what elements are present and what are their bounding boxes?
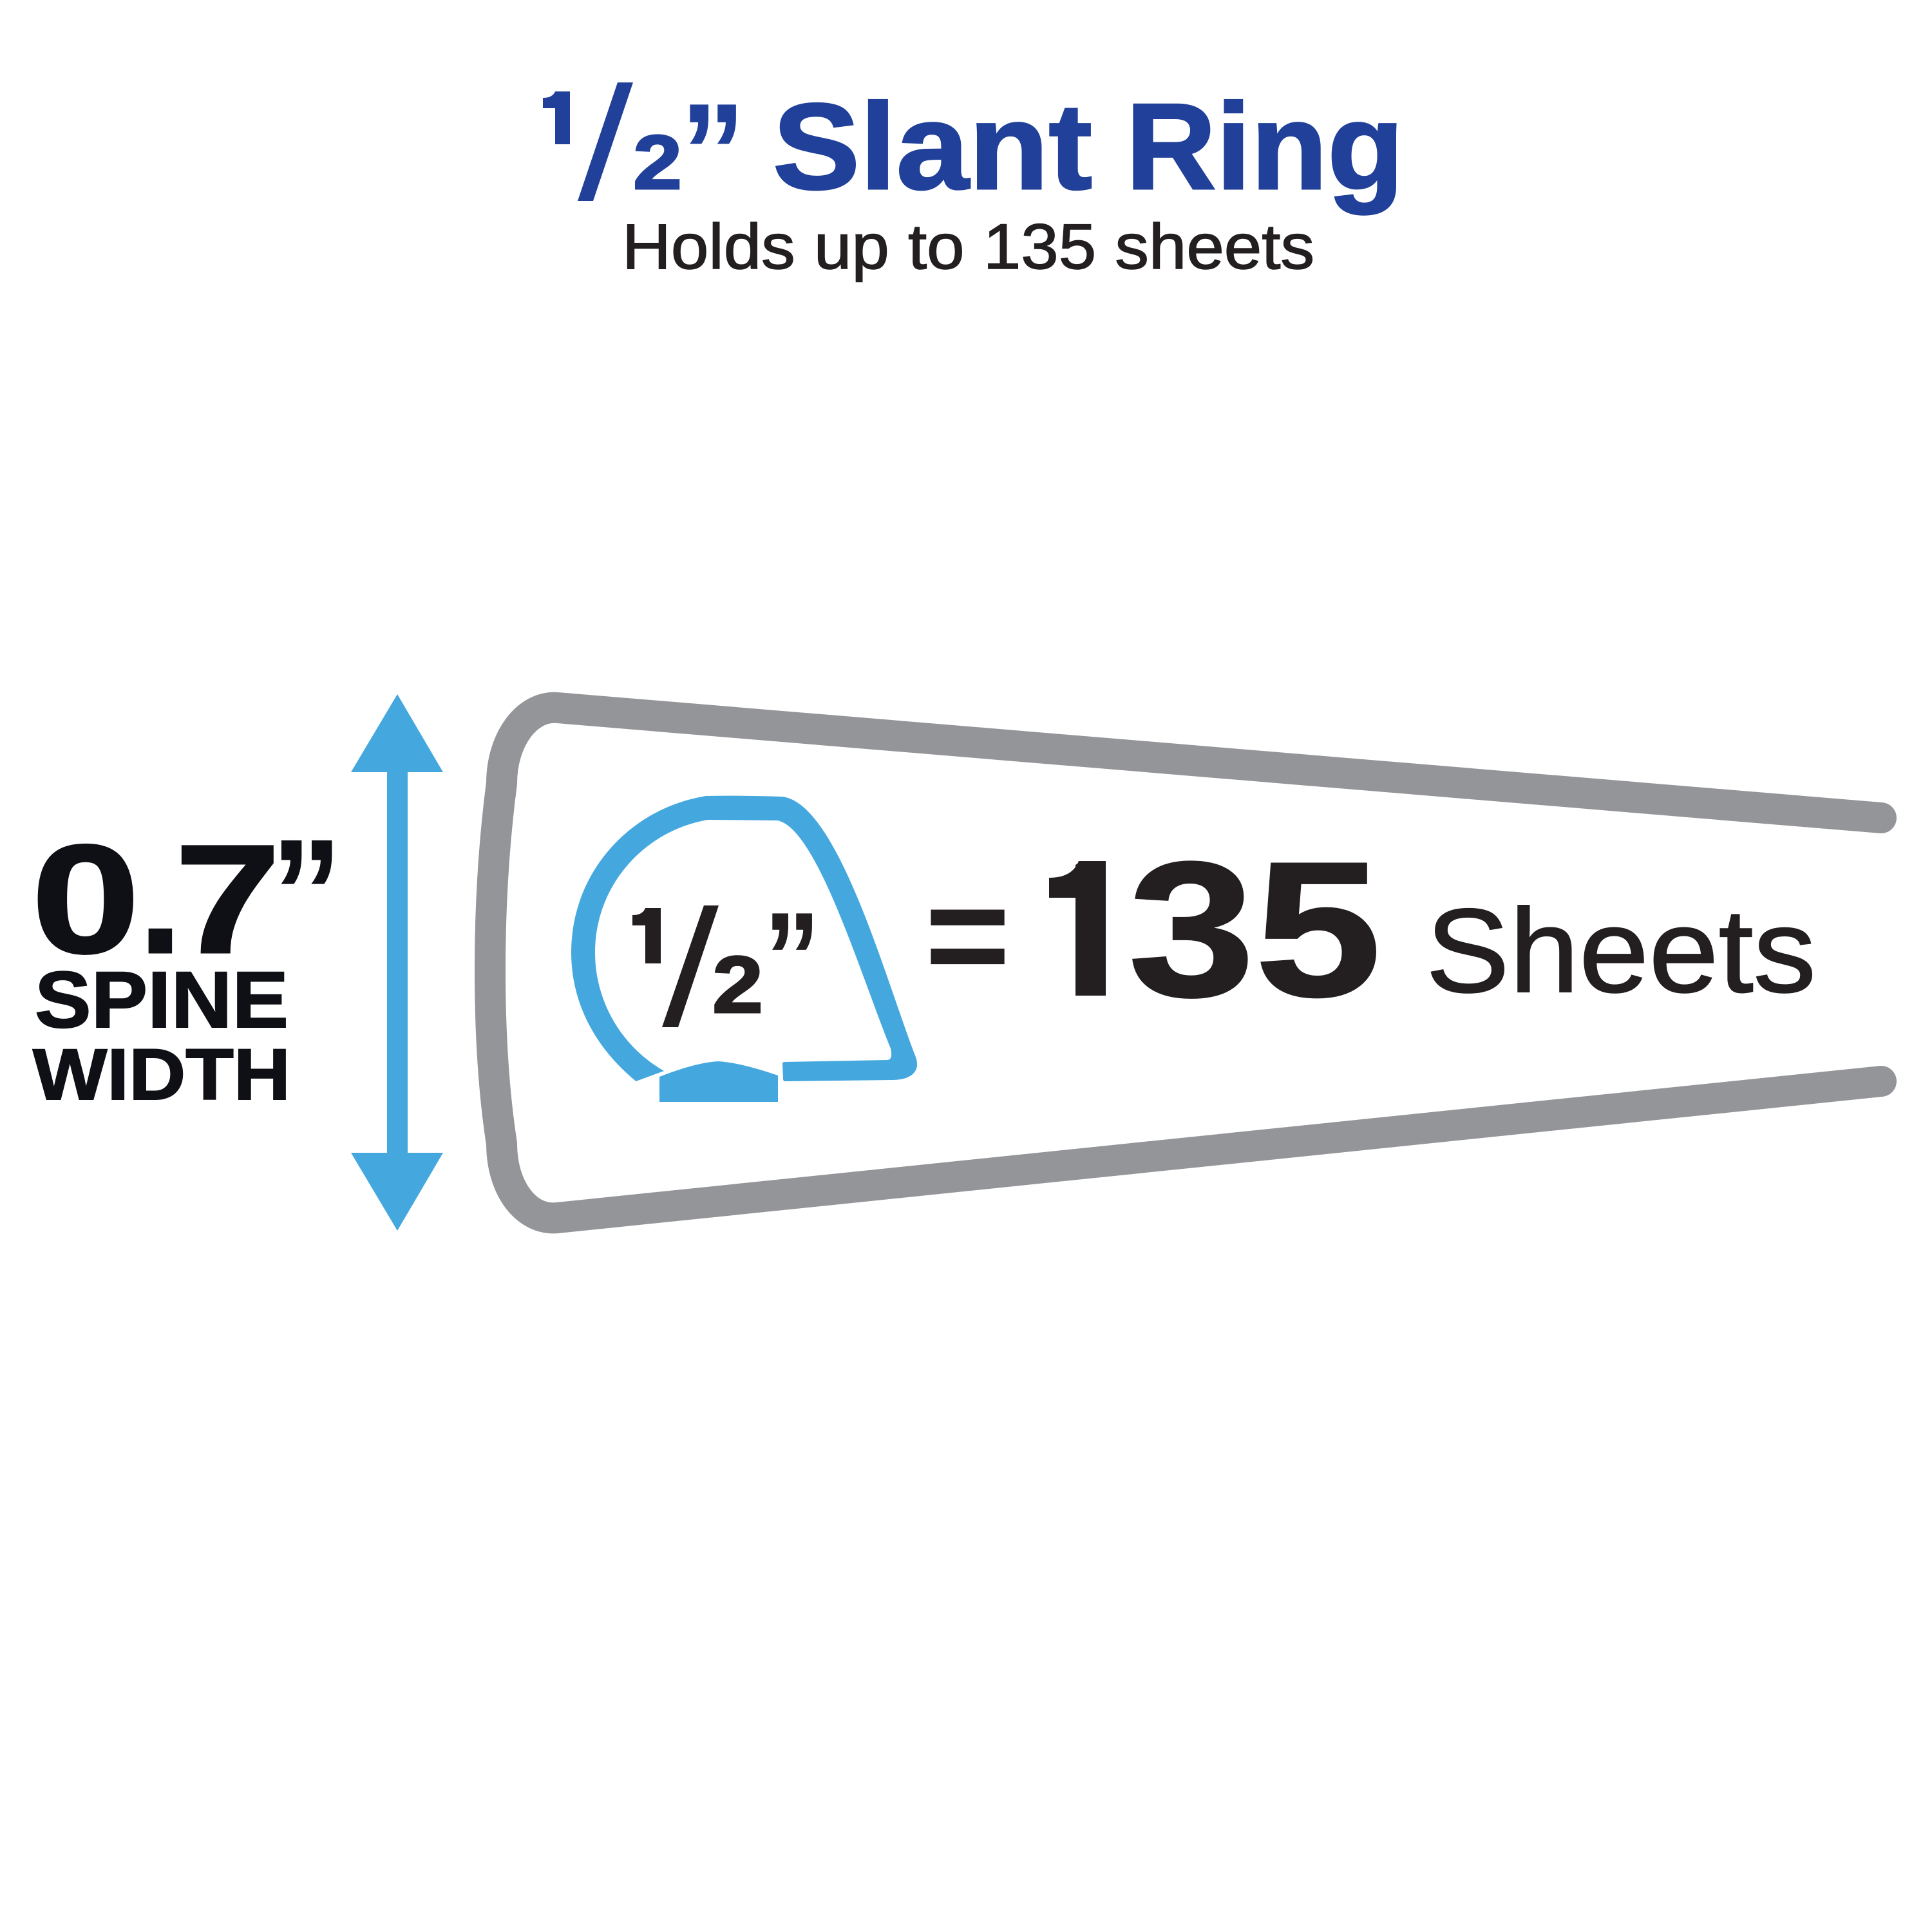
ring size label: 1/2" — [632, 905, 812, 1027]
word WIDTH: WIDTH — [33, 1034, 290, 1115]
sheet count: 135 — [1049, 860, 1376, 999]
subtitle: Holds up to 135 sheets — [622, 211, 1314, 282]
digit 1: 1 — [1030, 822, 1144, 1037]
double-headed arrow: spine width — [351, 694, 443, 1231]
spine width label — [31, 807, 343, 1115]
spine width inch mark: ” — [270, 807, 343, 980]
ring label slash — [662, 905, 719, 1027]
spine width value: 7 — [175, 813, 281, 985]
title inch mark: ” — [680, 74, 746, 230]
ring label numerator: 1 — [629, 891, 674, 981]
digits 35: 35 — [1128, 822, 1381, 1037]
title fraction numerator — [543, 91, 570, 144]
ring label denominator: 2 — [712, 940, 763, 1030]
spine width value — [31, 813, 281, 985]
digit 1 — [1049, 861, 1106, 996]
label: Sheets: Sheets — [1426, 885, 1816, 1018]
binder spine outline — [490, 708, 1881, 1218]
ring label inch mark: ” — [764, 886, 820, 1030]
title fraction numerator: 1 — [541, 75, 583, 161]
ring label numerator — [632, 908, 661, 963]
word SPINE: SPINE — [35, 956, 289, 1045]
ring base — [659, 1061, 778, 1102]
spine width value: 0 — [31, 813, 140, 985]
ring band — [571, 796, 917, 1081]
title fraction slash — [578, 82, 633, 201]
title fraction denominator: 2 — [633, 120, 682, 205]
icon: slant ring — [571, 796, 917, 1102]
title: 1/2" Slant Ring — [543, 82, 1397, 216]
title word Ring: Ring — [1126, 79, 1404, 215]
equals sign: = — [925, 855, 1010, 1016]
title word Slant: Slant — [773, 79, 1092, 215]
spine width value: . — [139, 813, 182, 985]
